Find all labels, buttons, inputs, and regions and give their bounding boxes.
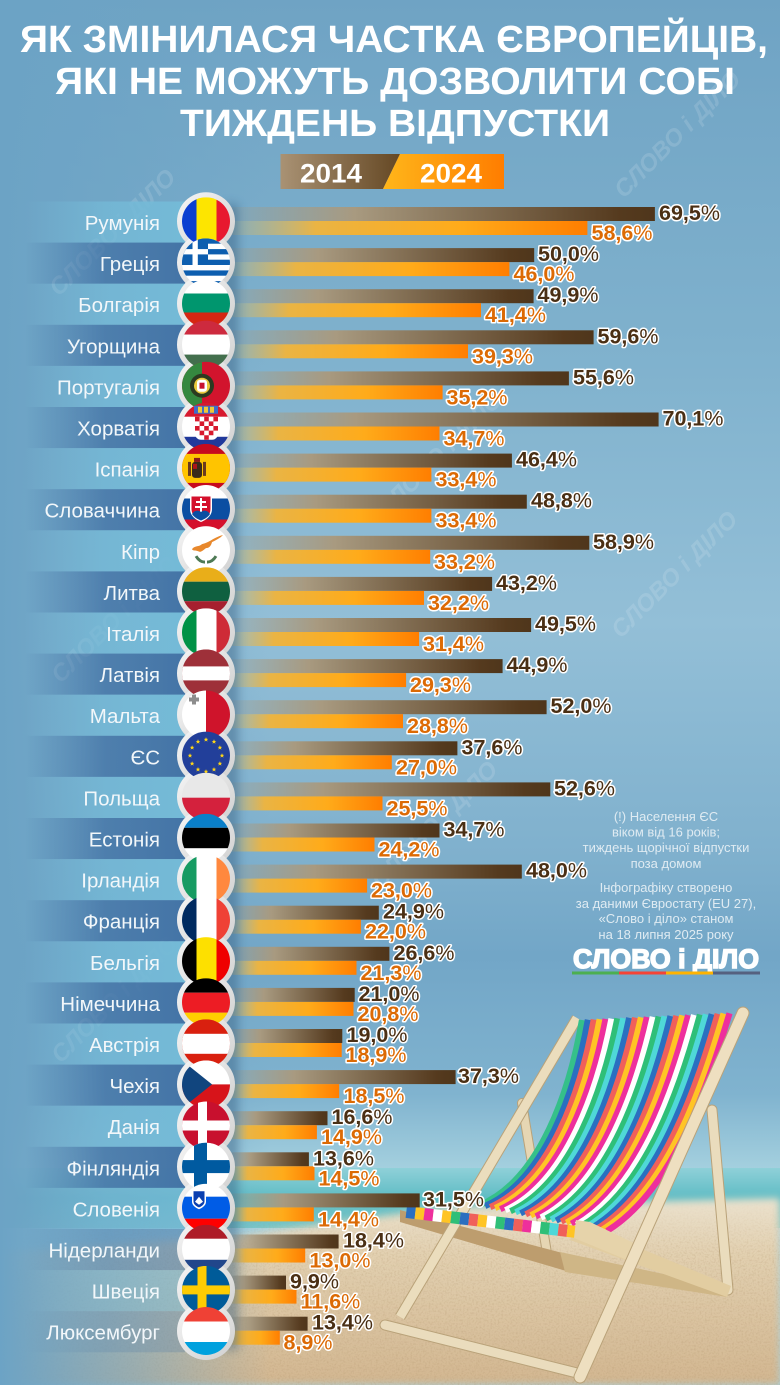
band: Австрія: Австрія	[89, 1034, 160, 1057]
bars: ЄС	[225, 735, 522, 779]
bars: Чехія: 37,3%	[458, 1064, 519, 1088]
bars: Латвія: 44,9%	[506, 653, 567, 677]
bars: Болгарія: 49,9%	[538, 283, 598, 307]
bars: Польща: 52,6%	[554, 776, 615, 800]
bars: Італія: 31,4%	[423, 632, 484, 656]
band: Франція: Франція	[83, 911, 160, 934]
band: Португалія: Португалія	[57, 376, 160, 399]
icon: flag of Bulgaria	[182, 281, 230, 324]
icon: flag of Slovenia	[182, 1184, 230, 1232]
bars: Бельгія: 26,6%	[394, 941, 454, 965]
icon: flag of Lithuania	[182, 567, 230, 615]
bars: Іспанія: 33,4%	[436, 468, 496, 492]
band: Словенія: Словенія	[73, 1198, 160, 1221]
bars: Чехія: 18,5%	[344, 1084, 404, 1108]
legend: 2014	[300, 158, 362, 188]
icon: flag of Cyprus	[182, 526, 230, 574]
bars: Бельгія: 21,3%	[360, 961, 421, 985]
bars: Фінляндія: 13,6%	[313, 1146, 374, 1170]
bars: Чехія	[225, 1064, 519, 1108]
icon: flag of Czechia	[182, 1060, 230, 1108]
icon: flag of Greece	[182, 238, 230, 286]
bars: ЄС: 27,0%	[396, 755, 457, 779]
bars: Данія	[225, 1105, 392, 1149]
icon: beach chair	[385, 1013, 743, 1377]
band: Люксембург: Люксембург	[46, 1322, 160, 1345]
band: Данія	[25, 1106, 185, 1147]
bars: Бельгія	[225, 941, 454, 985]
band: Греція	[25, 243, 185, 284]
band: Португалія	[25, 366, 185, 407]
icon: flag of France	[182, 898, 230, 940]
bars: Швеція: 11,6%	[300, 1290, 360, 1314]
methodology note: «Слово і діло» станом	[599, 911, 733, 926]
band: Кіпр	[25, 530, 185, 571]
icon: flag of Sweden	[182, 1266, 230, 1314]
band: Ірландія	[25, 859, 185, 900]
bars: Австрія	[225, 1023, 407, 1067]
watermarks: СЛОВО і ДІЛО	[44, 164, 182, 301]
band: Австрія	[25, 1024, 185, 1065]
icon: flag of Slovakia	[182, 485, 230, 534]
bars: Люксембург	[225, 1311, 373, 1355]
bars: Німеччина: 21,0%	[358, 982, 419, 1006]
methodology note: (!) Населення ЄС	[614, 809, 718, 824]
bars: Люксембург: 13,4%	[312, 1311, 373, 1335]
bars: Румунія: 58,6%	[592, 221, 652, 245]
watermarks: СЛОВО і ДІЛО	[366, 756, 504, 893]
band: Румунія: Румунія	[85, 212, 160, 235]
legend: 2024	[420, 158, 482, 188]
band: Чехія: Чехія	[109, 1075, 160, 1098]
watermarks: СЛОВО і ДІЛО	[606, 506, 744, 643]
band: Угорщина	[25, 325, 185, 366]
methodology note: на 18 липня 2025 року	[598, 927, 734, 942]
band: Італія: Італія	[106, 623, 160, 646]
bars: Ірландія	[225, 859, 587, 903]
bars: Хорватія: 70,1%	[662, 406, 723, 430]
bars: Ірландія: 23,0%	[371, 879, 432, 903]
bars: Португалія	[225, 365, 634, 409]
methodology note: за даними Євростату (EU 27),	[576, 896, 756, 911]
watermarks: СЛОВО і ДІЛО	[609, 66, 747, 203]
band: Румунія	[25, 202, 185, 243]
bars: Греція: 46,0%	[514, 262, 574, 286]
bars: Кіпр: 33,2%	[434, 550, 495, 574]
band: Данія: Данія	[108, 1116, 160, 1139]
bars: Португалія: 55,6%	[573, 365, 634, 389]
bars: Нідерланди: 13,0%	[310, 1248, 370, 1272]
bars: Італія	[225, 612, 596, 656]
bars: Угорщина: 39,3%	[472, 344, 533, 368]
icon: flag of Spain	[182, 444, 230, 492]
bars: Фінляндія	[225, 1146, 379, 1190]
band: Бельгія: Бельгія	[90, 952, 160, 975]
flag rings	[177, 192, 235, 1360]
band: Мальта	[25, 695, 185, 736]
band: Польща: Польща	[83, 787, 161, 810]
bars: Німеччина: 20,8%	[358, 1002, 418, 1026]
bars: Естонія	[225, 818, 504, 862]
bars: Іспанія: 46,4%	[516, 448, 577, 472]
band: Фінляндія	[25, 1147, 185, 1188]
bars: Словенія: 31,5%	[423, 1187, 484, 1211]
bars: Словаччина: 48,8%	[531, 489, 592, 513]
icon: flag of Denmark	[182, 1102, 230, 1150]
flags column	[182, 197, 230, 1355]
bars: Хорватія: 34,7%	[444, 426, 504, 450]
watermarks: СЛОВО і ДІЛО	[46, 551, 184, 688]
bars: Німеччина	[225, 982, 419, 1026]
bars: Словаччина	[225, 489, 592, 533]
icon: flag of Italy	[182, 608, 230, 656]
band: Польща	[25, 777, 185, 818]
watermarks: СЛОВО і ДІЛО	[46, 931, 184, 1068]
icon: flag of Malta	[182, 690, 230, 738]
bars: Латвія: 29,3%	[410, 673, 471, 697]
band: Угорщина: Угорщина	[67, 335, 161, 358]
bars: Естонія: 34,7%	[444, 818, 504, 842]
bars: Словенія	[225, 1187, 484, 1231]
bars: Польща	[225, 776, 615, 820]
band: Нідерланди: Нідерланди	[48, 1240, 160, 1262]
watermarks: СЛОВО і ДІЛО	[371, 386, 509, 523]
bars: Румунія	[225, 201, 720, 245]
title: ЯКІ НЕ МОЖУТЬ ДОЗВОЛИТИ СОБІ	[55, 61, 735, 103]
band: Італія	[25, 612, 185, 654]
bars: Данія: 14,9%	[321, 1125, 382, 1149]
bars: Литва: 43,2%	[496, 571, 557, 595]
band: Латвія: Латвія	[100, 664, 160, 687]
band: Німеччина: Німеччина	[60, 993, 161, 1016]
icon: flag of Germany	[182, 978, 230, 1027]
bars: Португалія: 35,2%	[446, 385, 507, 409]
bars: Нідерланди	[225, 1228, 404, 1272]
methodology note: Інфографіку створено	[600, 880, 732, 895]
title	[20, 16, 768, 145]
bars: Угорщина: 59,6%	[598, 324, 658, 348]
methodology note: тиждень щорічної відпустки	[583, 840, 749, 855]
bars: Люксембург: 8,9%	[284, 1331, 333, 1355]
band: Ірландія: Ірландія	[81, 870, 160, 893]
band: Хорватія	[25, 407, 185, 448]
bars: Нідерланди: 18,4%	[343, 1228, 404, 1252]
bars: Данія: 16,6%	[332, 1105, 392, 1129]
bars: Хорватія	[225, 406, 723, 450]
icon: flag of the Netherlands	[182, 1225, 230, 1273]
bars: Австрія: 18,9%	[346, 1043, 406, 1067]
bars: Естонія: 24,2%	[378, 838, 439, 862]
band: Естонія	[25, 818, 185, 859]
bar chart: 2014 and 2024 shares by country	[225, 201, 723, 1355]
bars: Франція	[225, 900, 444, 944]
icon: flag of Austria	[182, 1019, 230, 1067]
bars: Франція: 24,9%	[383, 900, 444, 924]
icon: flag of Luxembourg	[182, 1307, 230, 1355]
bars: Австрія: 19,0%	[346, 1023, 407, 1047]
bars: Кіпр: 58,9%	[593, 530, 654, 554]
icon: flag of Croatia	[182, 403, 230, 451]
band: Кіпр: Кіпр	[121, 541, 160, 564]
band: ЄС	[25, 736, 185, 777]
band: Естонія: Естонія	[89, 828, 160, 852]
bars: Болгарія: 41,4%	[485, 303, 546, 327]
icon: flag of Finland	[182, 1143, 230, 1191]
band: Чехія	[25, 1065, 185, 1106]
methodology note: віком від 16 років;	[612, 824, 720, 840]
band: Німеччина	[25, 982, 185, 1024]
bars: Румунія: 69,5%	[659, 201, 720, 225]
band: Франція	[25, 900, 185, 941]
bars: Швеція: 9,9%	[290, 1270, 339, 1294]
bars: ЄС: 37,6%	[462, 735, 522, 759]
band: Латвія	[25, 654, 185, 695]
bars: Литва: 32,2%	[428, 591, 489, 615]
band: Бельгія	[25, 941, 185, 982]
title: ТИЖДЕНЬ ВІДПУСТКИ	[180, 103, 610, 145]
icon: flag of Hungary	[182, 321, 230, 369]
band: Іспанія: Іспанія	[95, 459, 160, 482]
band: Хорватія: Хорватія	[77, 418, 160, 440]
bars: Литва	[225, 571, 557, 615]
icon: flag of Latvia	[182, 649, 230, 697]
band: Фінляндія: Фінляндія	[67, 1157, 160, 1180]
bars: Іспанія	[225, 448, 577, 492]
band: Словенія	[25, 1188, 185, 1229]
logo: СЛОВО і ДІЛО	[573, 944, 759, 974]
band: Мальта: Мальта	[90, 705, 161, 728]
title: ЯК ЗМІНИЛАСЯ ЧАСТКА ЄВРОПЕЙЦІВ,	[20, 16, 768, 61]
band: Литва	[25, 571, 185, 612]
bars: Італія: 49,5%	[535, 612, 596, 636]
band: Греція: Греція	[100, 253, 160, 276]
bars: Кіпр	[225, 530, 654, 574]
band: Іспанія	[25, 448, 185, 489]
bars: Франція: 22,0%	[365, 920, 426, 944]
bars: Болгарія	[225, 283, 598, 327]
bars: Греція	[225, 242, 599, 286]
icon: flag of Estonia	[182, 814, 230, 862]
country label bands	[25, 202, 185, 1352]
band: Нідерланди	[25, 1229, 185, 1270]
icon: flag of Belgium	[182, 937, 230, 985]
methodology note	[576, 809, 756, 942]
bars: Швеція	[225, 1270, 360, 1314]
bars: Угорщина	[225, 324, 658, 368]
legend	[280, 154, 504, 189]
watermarks	[44, 66, 747, 1068]
methodology note: поза домом	[631, 856, 701, 871]
bars: Словаччина: 33,4%	[436, 509, 496, 533]
band: Болгарія	[25, 284, 185, 325]
bars: Польща: 25,5%	[386, 796, 447, 820]
bars: Фінляндія: 14,5%	[318, 1166, 379, 1190]
band: Швеція	[25, 1270, 185, 1311]
icon: flag of Romania	[182, 197, 230, 245]
icon: flag of Poland	[182, 773, 230, 822]
bars: Мальта	[225, 694, 611, 738]
band: Швеція: Швеція	[92, 1281, 160, 1304]
bars: Мальта: 52,0%	[550, 694, 611, 718]
bars: Словенія: 14,4%	[318, 1207, 379, 1231]
band: ЄС: ЄС	[130, 746, 160, 769]
bars: Ірландія: 48,0%	[526, 859, 587, 883]
icon: flag of Ireland	[182, 856, 230, 900]
icon: flag of Portugal	[182, 362, 230, 410]
bars: Латвія	[225, 653, 567, 697]
bars: Греція: 50,0%	[538, 242, 599, 266]
bars: Мальта: 28,8%	[407, 714, 468, 738]
band: Люксембург	[25, 1311, 185, 1352]
band: Словаччина: Словаччина	[44, 500, 161, 523]
band: Словаччина	[25, 489, 185, 530]
band: Литва: Литва	[104, 582, 161, 605]
icon: flag of the EU	[182, 732, 230, 780]
band: Болгарія: Болгарія	[78, 294, 160, 317]
